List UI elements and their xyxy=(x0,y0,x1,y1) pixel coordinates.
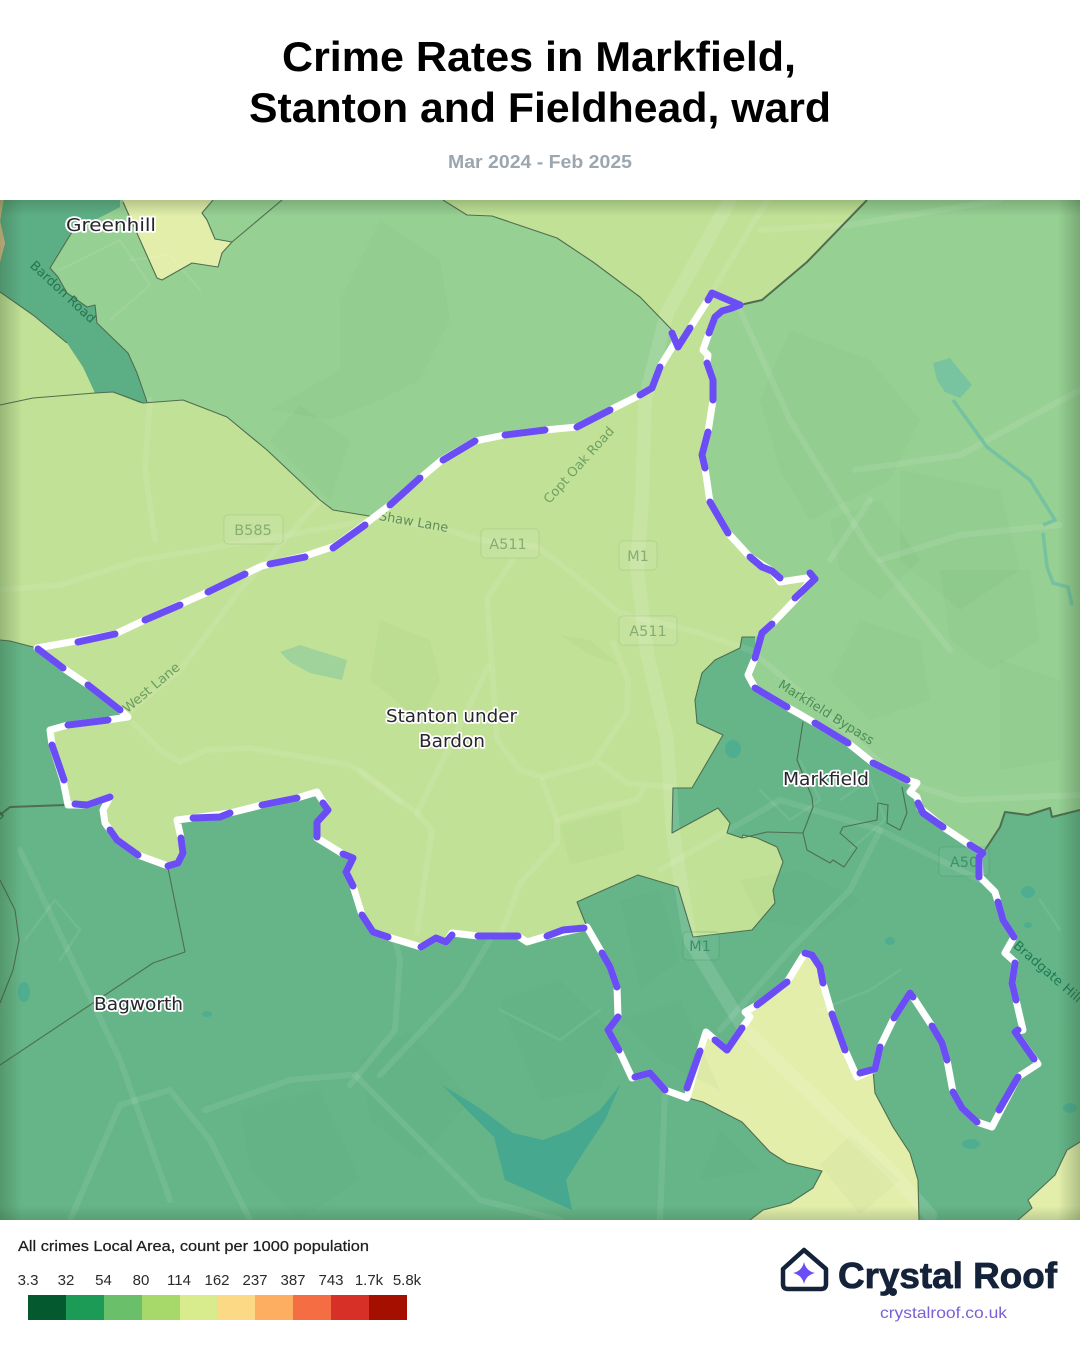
road shield: A50 xyxy=(939,847,989,876)
logo key tail xyxy=(889,1288,897,1296)
place label: Greenhill: Greenhill xyxy=(66,215,156,236)
ward boundary: white outline xyxy=(37,293,1038,1127)
legend scale labels: 32 xyxy=(58,1272,74,1289)
legend scale labels: 114 xyxy=(167,1272,191,1289)
road shield: B585 xyxy=(224,515,283,544)
website url: crystalroof.co.uk xyxy=(880,1305,1008,1322)
region: mid green base xyxy=(0,200,1080,850)
region: pale yellow corner xyxy=(1018,1142,1080,1220)
road shield: M1 north: M1 xyxy=(627,549,649,565)
road shield: A511 west xyxy=(481,529,539,558)
choropleth map xyxy=(0,200,1080,1220)
place label: Bagworth: Bagworth xyxy=(94,994,183,1015)
legend scale labels: 1.7k xyxy=(355,1272,384,1289)
legend scale labels: 80 xyxy=(133,1272,149,1289)
logo wordmark: Crystal Roof xyxy=(838,1255,1058,1296)
legend scale labels: 387 xyxy=(280,1272,306,1289)
region boundary lines xyxy=(0,200,1080,1220)
legend scale labels: 5.8k xyxy=(393,1272,422,1289)
place label: Stanton under Bardon: Stanton under xyxy=(386,706,518,727)
map edge vignette xyxy=(0,200,1080,1220)
region: light green ward centre xyxy=(0,200,867,947)
road shield: M1 south xyxy=(683,932,719,960)
legend scale labels: 743 xyxy=(318,1272,344,1289)
road label: Markfield Bypass: Markfield Bypass xyxy=(775,678,877,749)
road shield: M1 south: M1 xyxy=(689,939,711,955)
place label: Stanton under Bardon xyxy=(386,706,518,752)
region: Greenhill pale xyxy=(123,200,232,280)
water: pond in ward xyxy=(280,645,347,680)
region: pale yellow south xyxy=(688,953,919,1220)
region: tan corner sliver xyxy=(0,200,5,262)
title xyxy=(249,33,831,131)
water: river and lakes east xyxy=(933,358,1072,605)
legend scale labels: 237 xyxy=(242,1272,268,1289)
legend title: All crimes Local Area, count per 1000 population xyxy=(18,1238,369,1255)
woodland patches xyxy=(240,220,1060,1220)
title: Crime Rates in Markfield, xyxy=(282,33,796,80)
ward boundary xyxy=(37,293,1038,1127)
road network xyxy=(0,200,1080,1220)
legend xyxy=(18,1238,422,1320)
road label: Copt Oak Road: Copt Oak Road xyxy=(541,424,618,507)
legend scale labels: 162 xyxy=(204,1272,230,1289)
water: small ponds xyxy=(18,740,1077,1149)
logo: Crystal Roof xyxy=(783,1250,1058,1322)
region: light green north-west xyxy=(0,292,95,405)
place label: Stanton under Bardon: Bardon xyxy=(419,731,485,752)
road shield: A50: A50 xyxy=(950,855,978,871)
legend scale labels: 3.3 xyxy=(18,1272,38,1289)
road shield: A511 east: A511 xyxy=(629,624,667,640)
road shield: A511 west: A511 xyxy=(489,537,527,553)
road label: West Lane: West Lane xyxy=(120,660,183,717)
ward boundary: purple dashes xyxy=(38,293,1034,1122)
road label: Shaw Lane: Shaw Lane xyxy=(378,509,449,536)
road shield: A511 east xyxy=(619,616,677,645)
place label: Markfield: Markfield xyxy=(783,769,869,790)
road label: Bardon Road: Bardon Road xyxy=(27,258,98,327)
legend colour ramp xyxy=(28,1295,407,1320)
legend scale labels: 54 xyxy=(95,1272,112,1289)
water: reservoir xyxy=(442,1085,620,1210)
road shield: M1 north xyxy=(619,541,657,570)
road shield: B585: B585 xyxy=(234,523,272,539)
title: Stanton and Fieldhead, ward xyxy=(249,84,831,131)
region: dark green south xyxy=(0,637,1080,1220)
icon: house with star xyxy=(783,1250,826,1289)
legend scale labels xyxy=(18,1272,422,1289)
region: Bardon Road dark band xyxy=(0,200,147,403)
subtitle: date range: Mar 2024 - Feb 2025 xyxy=(448,152,632,172)
